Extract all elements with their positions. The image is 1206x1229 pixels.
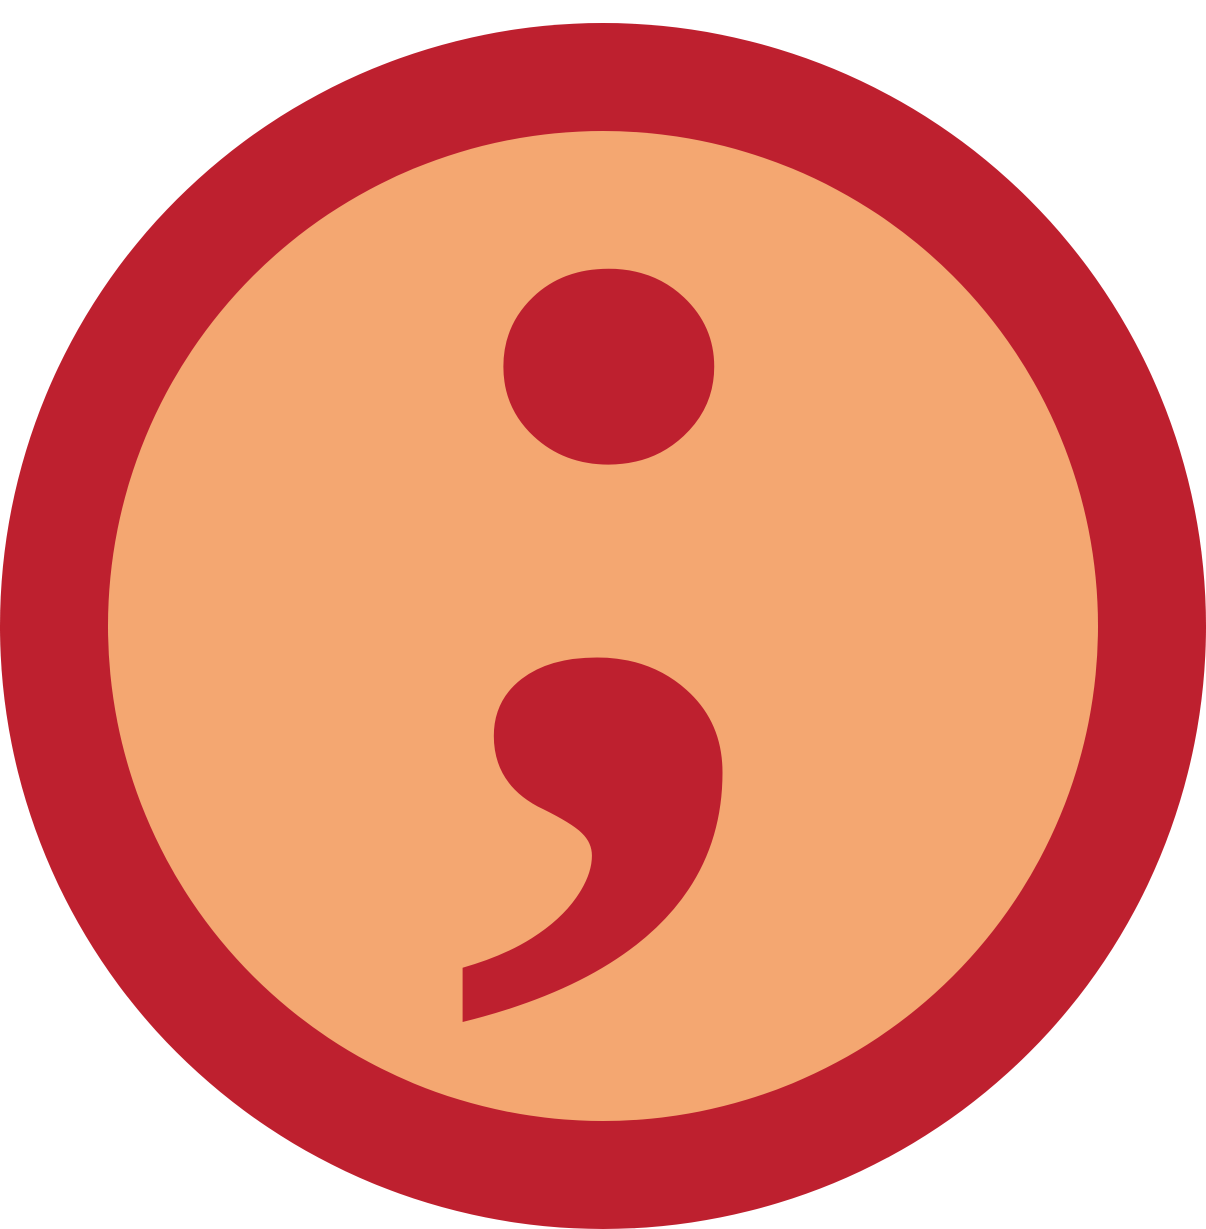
inner peach disc	[108, 131, 1098, 1121]
